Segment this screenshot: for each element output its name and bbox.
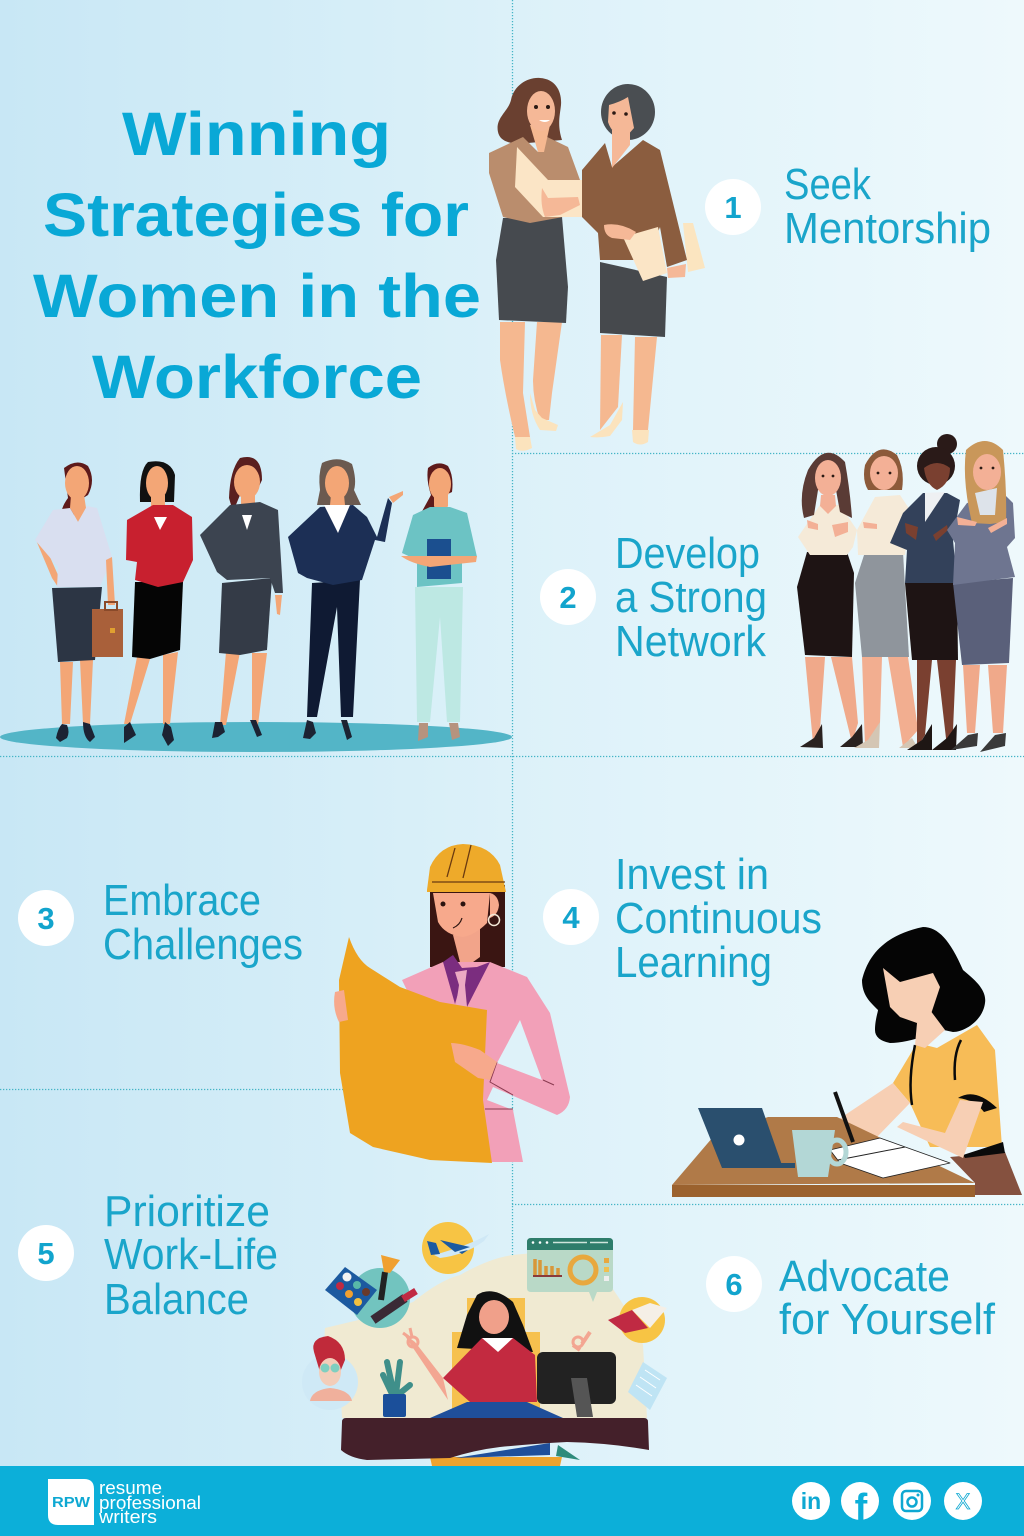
step 4: Invest in	[615, 850, 769, 899]
illustration: five professional women on teal ellipse	[0, 457, 512, 752]
step 2: Develop	[615, 529, 760, 578]
woman with short auburn hair	[854, 449, 918, 748]
title	[33, 100, 481, 411]
step 1: Mentorship	[784, 204, 991, 253]
logo: professional	[99, 1493, 201, 1513]
spa woman icon	[302, 1336, 358, 1410]
woman one with briefcase	[35, 462, 123, 742]
title: Women in the	[33, 262, 481, 330]
step 1: Seek	[784, 160, 872, 209]
illustration: two women with folders (mentorship)	[489, 78, 705, 451]
step 5: 5	[37, 1236, 55, 1271]
step 6: for Yourself	[779, 1295, 996, 1344]
step 3: 3	[37, 901, 55, 936]
paper note icon	[628, 1362, 667, 1410]
logo: writers	[98, 1507, 157, 1527]
step 6: Advocate	[779, 1252, 950, 1301]
social icon: instagram	[893, 1482, 931, 1520]
step 3	[18, 876, 303, 969]
book icon	[608, 1297, 667, 1343]
step 1: 1	[724, 190, 742, 225]
woman with dark wavy hair	[797, 453, 863, 748]
illustration: engineer in hard hat with blueprint	[334, 844, 570, 1163]
step 4: Continuous	[615, 894, 822, 943]
social icon: facebook: f	[855, 1487, 868, 1529]
woman with dark skin and bun	[890, 434, 960, 750]
illustration: four women with crossed arms (network)	[797, 434, 1015, 752]
illustration: woman writing at desk	[672, 927, 1022, 1197]
logo	[48, 1478, 201, 1527]
social icon: x: X	[956, 1489, 971, 1514]
step 6	[706, 1252, 996, 1344]
logo: RPW	[52, 1495, 90, 1511]
step 2: 2	[559, 580, 577, 615]
social icon: x	[944, 1482, 982, 1520]
dashboard speech bubble	[527, 1238, 613, 1302]
step 2: Network	[615, 617, 767, 666]
woman two in red jacket	[124, 461, 193, 746]
makeup icon	[325, 1255, 416, 1328]
step 5	[18, 1187, 278, 1324]
woman three in grey suit	[200, 457, 283, 738]
step 5: Balance	[104, 1275, 249, 1324]
footer bar	[0, 1466, 1024, 1536]
illustration: woman meditating at desk with life icons	[302, 1222, 667, 1466]
plane icon	[422, 1222, 489, 1274]
social icon: facebook	[841, 1482, 879, 1529]
step 3: Embrace	[103, 876, 261, 925]
woman with long blond hair	[947, 441, 1015, 752]
title: Workforce	[92, 343, 422, 411]
plant pot	[383, 1362, 410, 1417]
step 2	[540, 529, 767, 666]
office chair	[452, 1298, 540, 1412]
step 6: 6	[725, 1267, 743, 1302]
step 5: Prioritize	[104, 1187, 270, 1236]
woman four in navy suit	[288, 459, 403, 740]
woman five in teal with notebook	[401, 463, 477, 741]
social icon: linkedin	[792, 1482, 830, 1520]
social icon: linkedin: in	[801, 1488, 821, 1514]
step 4: Learning	[615, 938, 772, 987]
step 2: a Strong	[615, 573, 767, 622]
step 4	[543, 850, 822, 987]
title: Winning	[122, 100, 391, 168]
step 4: 4	[562, 900, 580, 935]
logo: resume	[99, 1478, 162, 1498]
title: Strategies for	[43, 181, 469, 249]
step 5: Work-Life	[104, 1230, 278, 1279]
step 3: Challenges	[103, 920, 303, 969]
step 1	[705, 160, 991, 253]
